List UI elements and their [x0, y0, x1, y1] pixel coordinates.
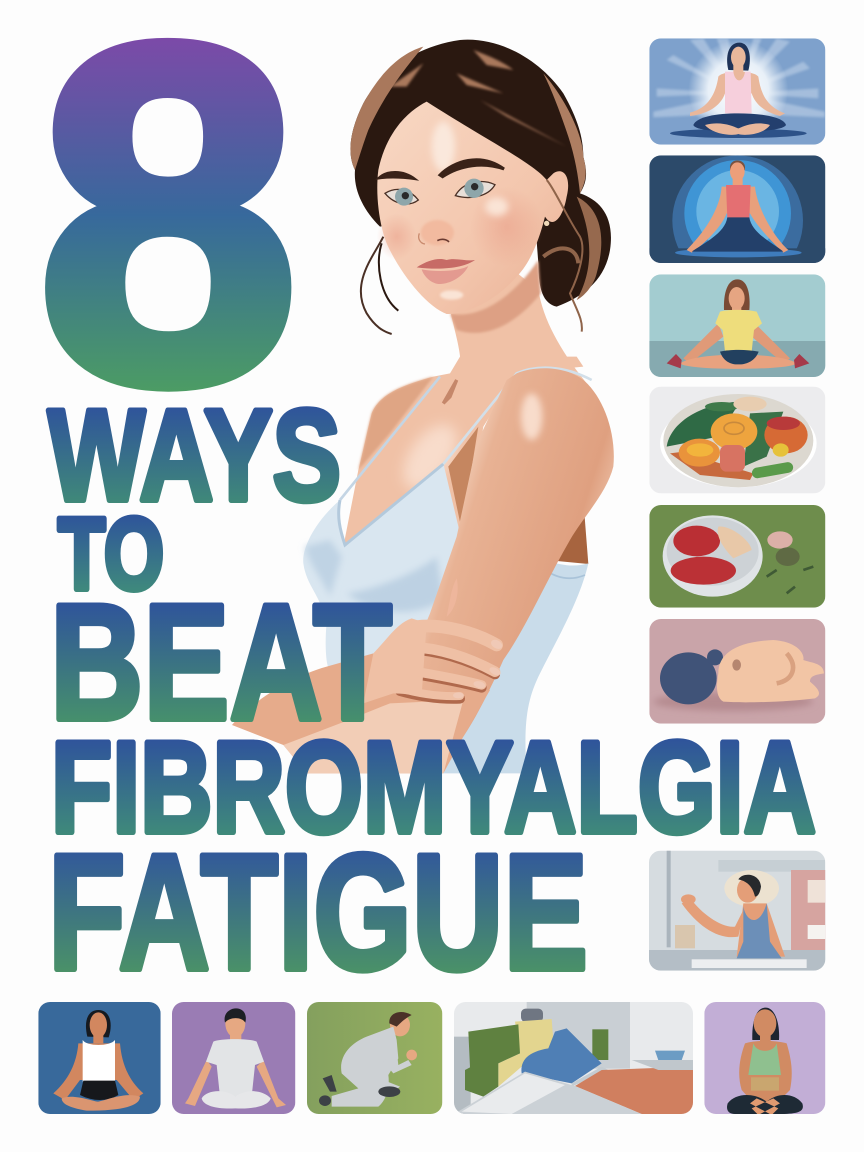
heading: WAYS: WAYS: [48, 382, 341, 528]
woman illustration: [232, 40, 614, 773]
body: [232, 357, 614, 773]
heading: BEAT: BEAT: [50, 570, 392, 754]
forearm: [232, 653, 490, 773]
panel: meditation with blue circles: [649, 155, 826, 263]
panel: bowl of food: [649, 505, 825, 608]
upper arm: [397, 368, 614, 737]
panel: vegetable plate: [649, 387, 825, 493]
heading: TO: TO: [58, 497, 164, 611]
panel: resting figure: [649, 619, 825, 724]
panel: man kneeling on green: [307, 1002, 442, 1114]
panel: meditation with light rays: [649, 38, 825, 145]
panel: meditation yellow shirt: [649, 274, 825, 377]
panel: meditation on blue: [38, 1002, 161, 1114]
panel: man seated on purple: [172, 1002, 295, 1114]
heading: FATIGUE: FATIGUE: [48, 820, 588, 1004]
tank top: [303, 368, 592, 773]
hair back and bun: [350, 40, 611, 307]
face: [361, 102, 582, 334]
panel: man in kitchen: [649, 851, 825, 971]
neck: [450, 260, 587, 383]
panel: bed with pillows: [454, 1002, 693, 1114]
panel: seated woman on purple: [704, 1002, 825, 1115]
hand: [363, 618, 504, 703]
